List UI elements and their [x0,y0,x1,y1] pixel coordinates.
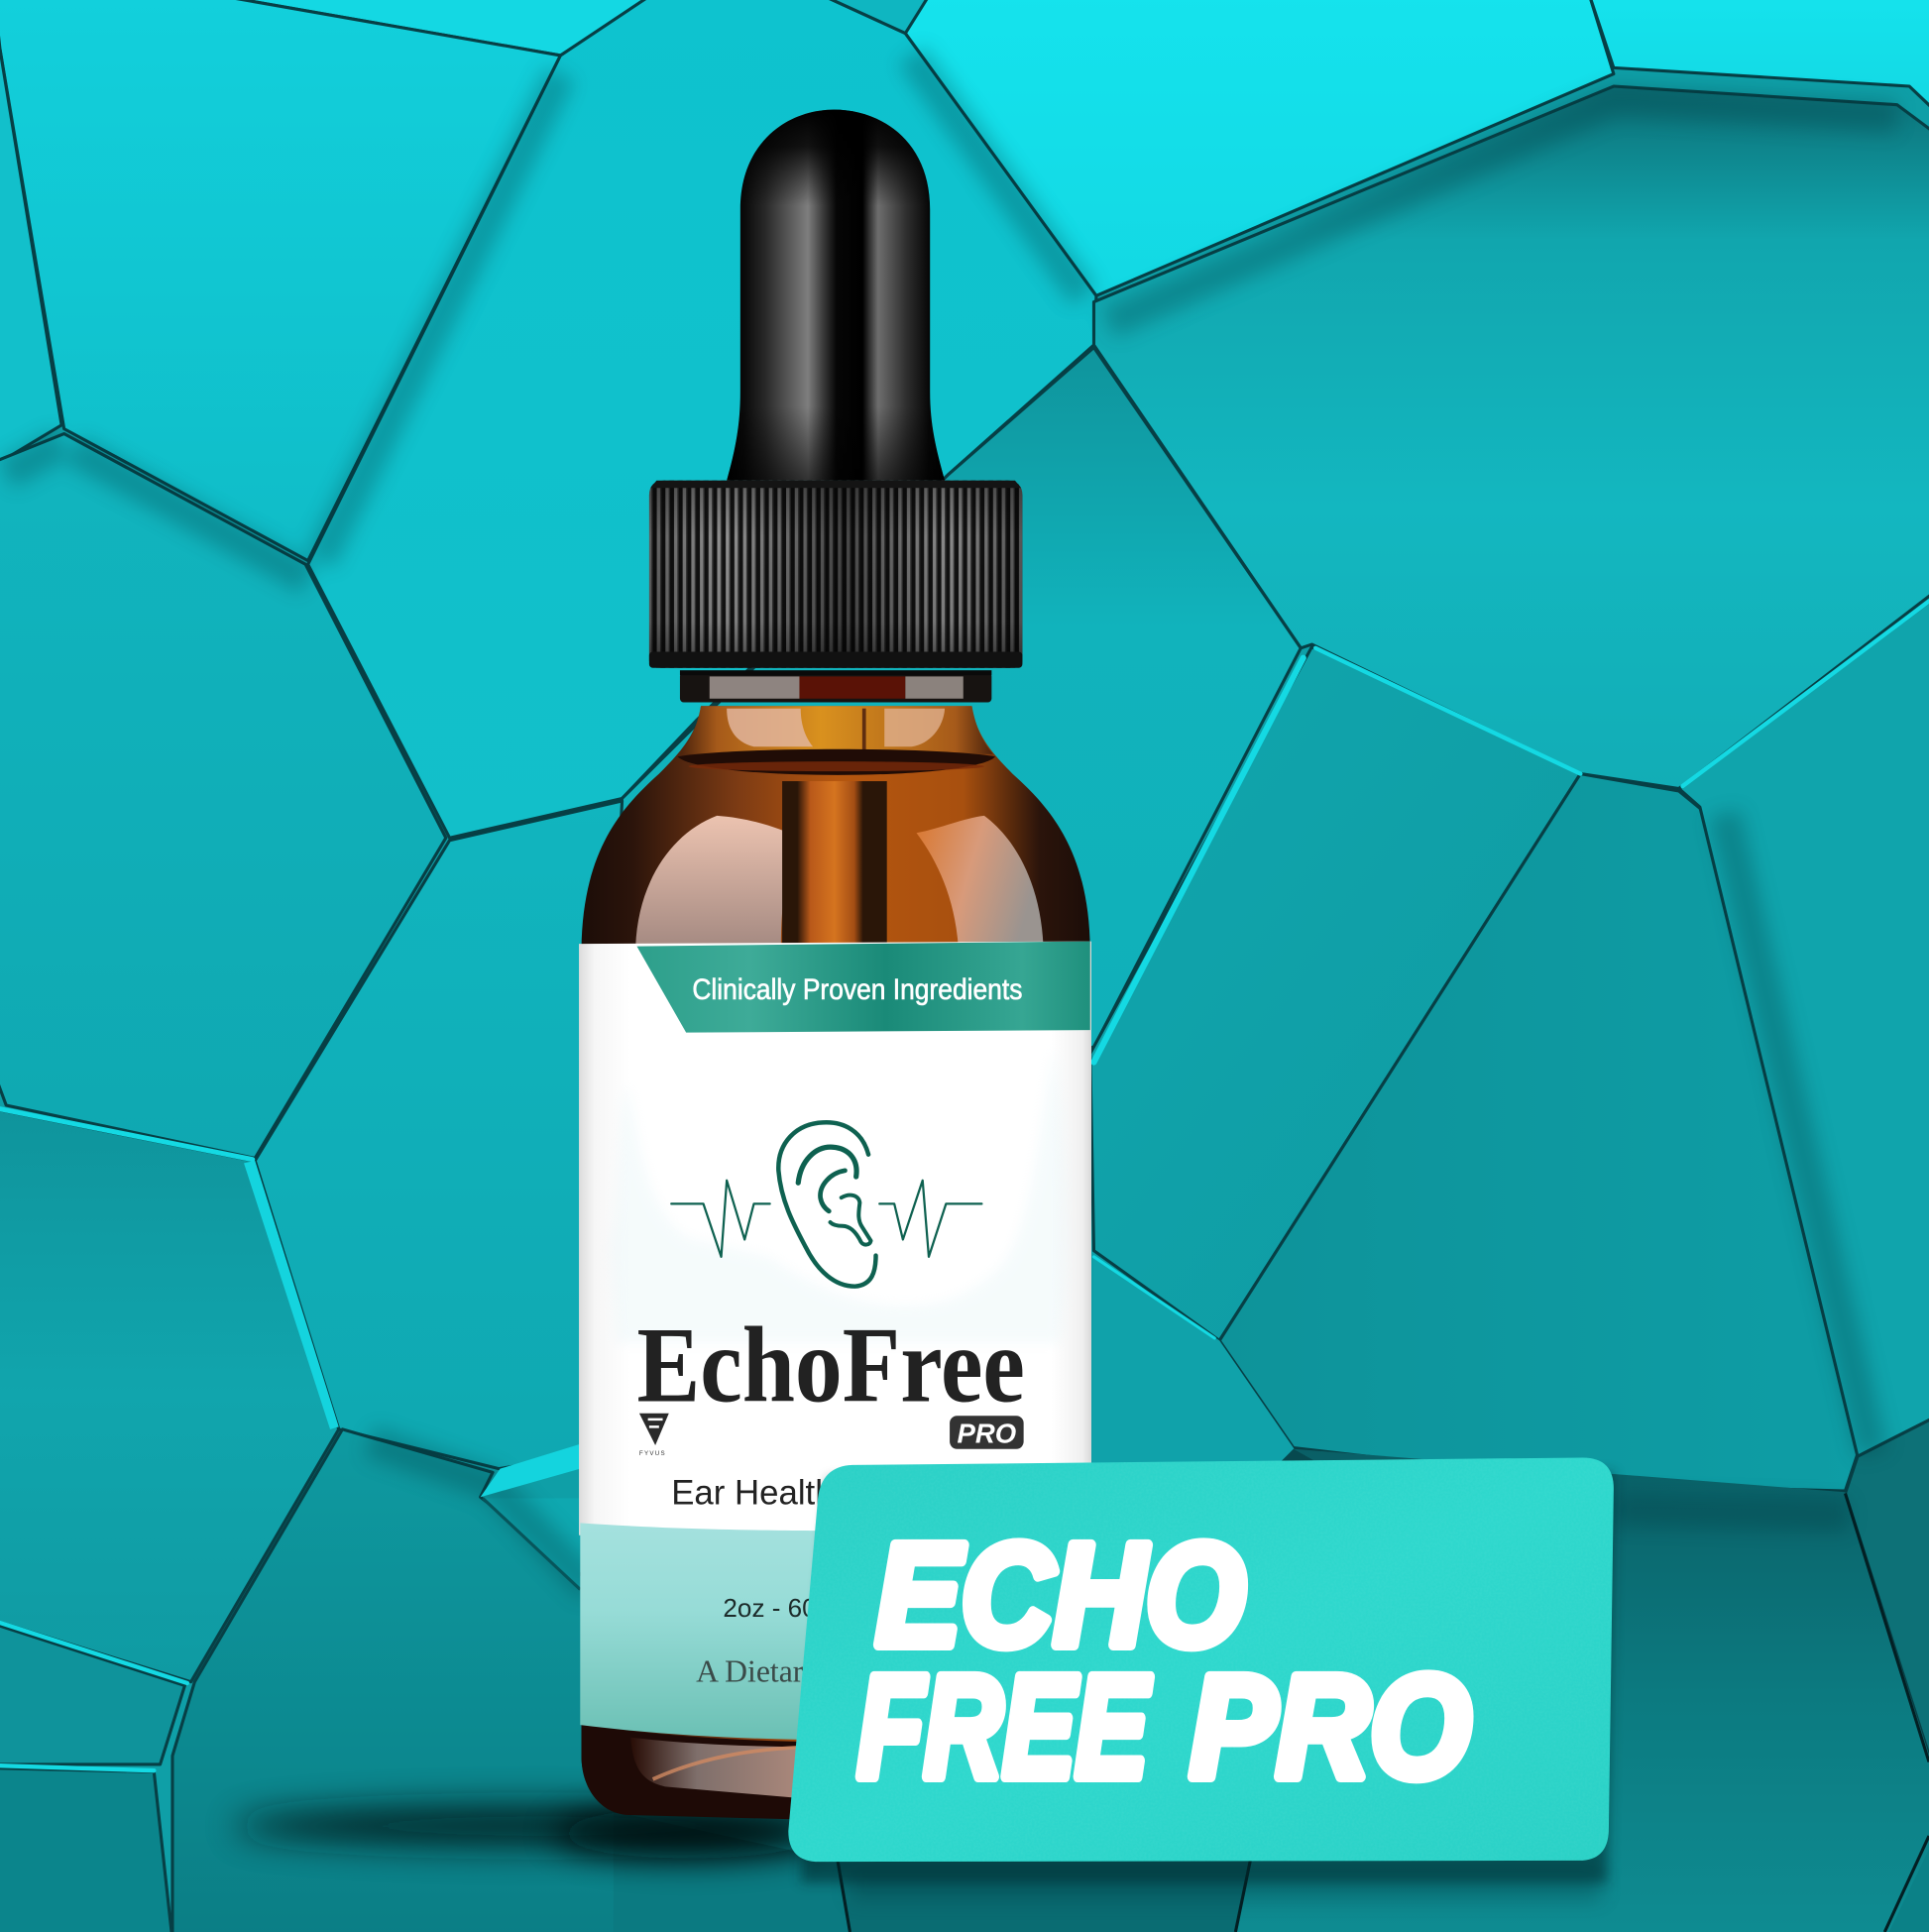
bulb [727,110,945,481]
icon: maker logo: FYVUS [639,1450,666,1457]
icon: maker logo [639,1414,669,1457]
badge heading line 2 [857,1646,1471,1808]
right shoulder highlight [917,816,1044,947]
word PRO: PRO [1190,1646,1471,1808]
badge shadow [801,1472,1614,1882]
left shoulder highlight [635,816,801,947]
cyan bevel wedges [244,1161,580,1497]
ribbed cap [649,481,1022,668]
dropper tube [782,781,887,948]
icon: ear with heartbeat lines [671,1122,981,1287]
brand name: EchoFree [636,1305,1025,1424]
badge: Echo Free Pro [788,1457,1614,1862]
bottle floor shadow [234,1804,850,1858]
supplement text: A Dietary Supplement [696,1654,977,1689]
small dark triangle behind badge [1282,1449,1313,1461]
cyan bevel edges [0,602,1929,1770]
product: dropper bottle [579,110,1091,1821]
label watermark wave [610,1048,1066,1343]
PRO tag: PRO [958,1419,1016,1449]
neck liquid [680,706,993,754]
label subtitle: Ear Health Support [671,1475,964,1513]
word FREE: FREE [857,1646,1151,1808]
bottom glass [582,1725,862,1821]
label top band [636,942,1090,1033]
label lower band [580,1523,1091,1740]
dark crack lines [483,1493,1929,1932]
meniscus band [677,749,995,775]
glass body [582,706,1090,1815]
neck ring [680,670,991,703]
volume text: 2oz - 60ml [723,1593,844,1623]
label [579,942,1091,1740]
band text: Clinically Proven Ingredients [692,973,1022,1006]
label white panel [579,942,1091,1535]
lower wall cells [487,1338,1929,1932]
neck highlights [727,709,945,757]
badge heading line 1: ECHO [876,1514,1245,1676]
